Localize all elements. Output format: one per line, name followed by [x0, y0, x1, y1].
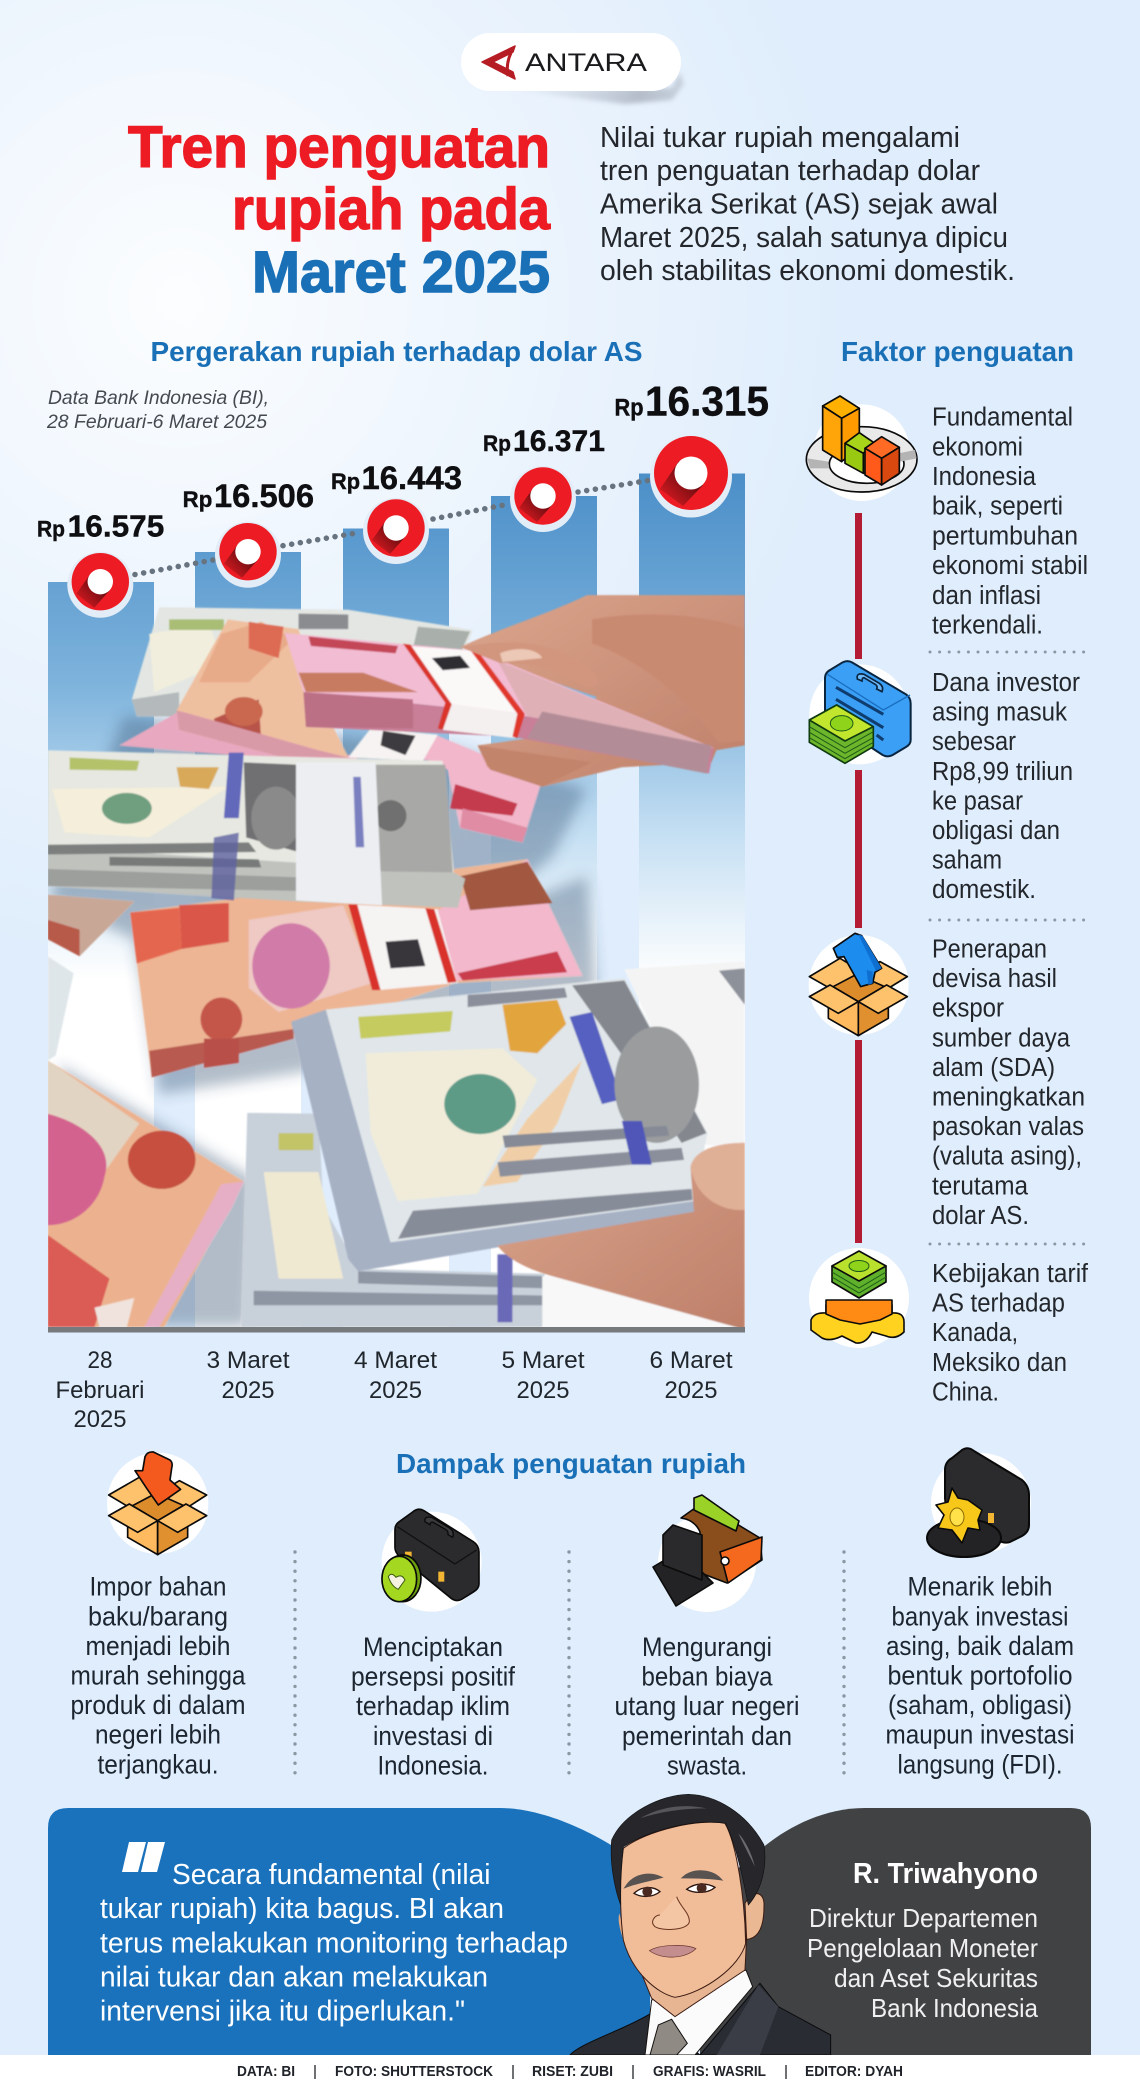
text: impact 4: (saham, obligasi) — [888, 1690, 1072, 1720]
white paper — [542, 1276, 745, 1329]
date labels: 2025 — [516, 1377, 570, 1404]
bars — [48, 474, 745, 1328]
value labels: 16.506 — [214, 478, 314, 514]
text: impact 3: swasta. — [667, 1750, 747, 1780]
date labels: 2025 — [222, 1377, 274, 1404]
text: impact 1: negeri lebih — [95, 1720, 221, 1750]
text: factor 1: dan inflasi — [932, 582, 1041, 610]
data source note: 28 Februari-6 Maret 2025 — [46, 411, 267, 433]
date labels: 2025 — [369, 1377, 422, 1404]
title — [128, 115, 551, 305]
text: impact 3: Mengurangi — [642, 1632, 772, 1662]
face — [621, 1822, 746, 1997]
value labels: 16.315 — [645, 378, 769, 424]
text: impact 4: Menarik lebih — [908, 1572, 1052, 1602]
brows — [626, 1875, 661, 1887]
text: impact 3: utang luar negeri — [614, 1691, 800, 1721]
text: impact 2: terhadap iklim — [356, 1691, 510, 1721]
speaker role: Pengelolaan Moneter — [807, 1933, 1038, 1963]
text: factor 4: AS terhadap — [932, 1290, 1065, 1318]
quote text: nilai tukar dan akan melakukan — [100, 1962, 488, 1994]
marker: 4 Mar — [363, 498, 429, 564]
panel: factors timeline — [806, 396, 1090, 1406]
dotted trend line — [135, 480, 651, 574]
text: impact 4: banyak investasi — [892, 1601, 1068, 1631]
marker: 5 Mar — [510, 466, 576, 532]
title: Maret 2025 — [252, 240, 550, 305]
footer: credits — [0, 2055, 1140, 2090]
footer: credits: EDITOR: DYAH — [805, 2064, 903, 2080]
text: factor 3: sumber daya — [932, 1024, 1071, 1052]
icon: box with up arrow — [809, 933, 909, 1036]
text: factor 1: pertumbuhan — [932, 522, 1078, 550]
icon: debt tower and wallet — [653, 1495, 762, 1612]
text: factor 3: devisa hasil — [932, 965, 1057, 993]
date labels: 5 Maret — [502, 1347, 585, 1374]
footer: credits: RISET: ZUBI — [532, 2064, 613, 2080]
text: impact 1 — [70, 1572, 246, 1779]
icon: black briefcase with gold star — [927, 1448, 1031, 1557]
text: factor 4: Meksiko dan — [932, 1349, 1067, 1377]
ear — [745, 1894, 764, 1939]
large dollar stack — [48, 847, 465, 908]
text: impact 2: investasi di — [373, 1721, 493, 1751]
bar chart — [37, 378, 769, 1332]
speaker role: dan Aset Sekuritas — [834, 1963, 1038, 1993]
icon: quotation mark — [122, 1842, 165, 1872]
speaker role: Direktur Departemen — [809, 1903, 1038, 1933]
value labels: 16.575 — [68, 509, 164, 544]
text: factor 3: meningkatkan — [932, 1084, 1085, 1112]
value labels: Rp — [614, 394, 644, 422]
panel: impact 4 — [886, 1448, 1074, 1779]
neck — [640, 1937, 747, 2017]
date labels: 6 Maret — [650, 1347, 733, 1374]
icon: box with down arrow — [107, 1452, 208, 1555]
date labels: Februari — [56, 1377, 144, 1404]
date labels: 4 Maret — [354, 1347, 437, 1374]
value labels: 16.371 — [513, 425, 605, 458]
text: factor 3: terutama — [932, 1172, 1029, 1200]
dividers — [295, 1552, 844, 1774]
text: factor 2: Dana investor — [932, 669, 1080, 697]
text: factor 1: ekonomi — [932, 433, 1023, 461]
date labels: 28 — [88, 1347, 112, 1374]
text: factor 4: Kebijakan tarif — [932, 1260, 1089, 1288]
text: impact 1: terjangkau. — [98, 1749, 218, 1779]
footer: credits: FOTO: SHUTTERSTOCK — [335, 2064, 493, 2080]
date labels: 2025 — [74, 1406, 126, 1433]
front dollar bundle — [291, 1010, 696, 1271]
text: impact 1: baku/barang — [88, 1601, 228, 1631]
logo: ANTARA: ANTARA — [525, 49, 647, 77]
text: factor 1: Fundamental — [932, 404, 1073, 432]
photo: rupiah and dollar banknotes — [48, 595, 745, 1329]
left strip — [48, 895, 134, 956]
speaker role: Bank Indonesia — [871, 1993, 1038, 2023]
heading: factors: Faktor penguatan — [841, 336, 1074, 367]
text: impact 1: menjadi lebih — [86, 1631, 230, 1661]
value labels — [37, 378, 769, 544]
date labels: 3 Maret — [206, 1347, 290, 1374]
intro text — [600, 122, 1015, 287]
panel: speaker — [700, 1808, 1091, 2055]
lips — [649, 1945, 696, 1957]
tie — [650, 2019, 687, 2055]
icon: money on puzzle piece — [809, 1248, 909, 1348]
back dollar stack — [132, 607, 473, 716]
panel: impact 3 — [614, 1495, 800, 1780]
panel: impact 1 — [70, 1452, 246, 1779]
intro text: tren penguatan terhadap dolar — [600, 155, 980, 187]
text: impact 4: bentuk portofolio — [888, 1660, 1072, 1690]
quote text — [100, 1859, 568, 2028]
back pink note — [423, 735, 541, 828]
title: rupiah pada — [232, 177, 551, 242]
text: factor 3: dolar AS. — [932, 1202, 1029, 1230]
text: factor 2: saham — [932, 847, 1002, 875]
text: impact 4 — [886, 1572, 1074, 1779]
text: impact 2 — [351, 1632, 516, 1780]
text: factor 3: Penerapan — [932, 936, 1047, 964]
text: factor 2 — [932, 669, 1080, 904]
text: factor 2: domestik. — [932, 876, 1036, 904]
text: factor 2: obligasi dan — [932, 817, 1060, 845]
value labels: 16.443 — [362, 460, 462, 496]
intro text: oleh stabilitas ekonomi domestik. — [600, 255, 1015, 287]
speaker name: R. Triwahyono — [853, 1858, 1038, 1890]
data source note — [46, 387, 269, 433]
peach note stack — [177, 619, 348, 758]
quote text: Secara fundamental (nilai — [172, 1859, 490, 1891]
marker: 3 Mar — [215, 522, 281, 588]
value labels: Rp — [331, 469, 360, 494]
text: factor 3: pasokan valas — [932, 1113, 1084, 1141]
footer: credits: DATA: BI — [237, 2064, 295, 2080]
text: impact 4: asing, baik dalam — [886, 1631, 1074, 1661]
rupiah bundle in hand — [285, 633, 714, 774]
text: factor 2: sebesar — [932, 728, 1016, 756]
hair — [611, 1794, 765, 1905]
text: factor 4: Kanada, — [932, 1319, 1018, 1347]
marker: 6 Mar — [650, 436, 732, 518]
icon: briefcase and money — [809, 661, 911, 764]
eyes — [634, 1888, 660, 1896]
text: factor 3: (valuta asing), — [932, 1143, 1082, 1171]
text: impact 3: beban biaya — [642, 1662, 773, 1692]
lower pink note — [130, 859, 582, 1077]
text: impact 2: persepsi positif — [351, 1662, 516, 1692]
text: impact 2: Indonesia. — [378, 1750, 488, 1780]
quote text: tukar rupiah) kita bagus. BI akan — [100, 1893, 504, 1925]
text: factor 1: ekonomi stabil — [932, 552, 1088, 580]
top hand — [463, 595, 745, 787]
lower left pink note — [48, 1060, 244, 1327]
text: factor 3: ekspor — [932, 995, 1004, 1023]
panel: quote — [48, 1808, 650, 2055]
text: impact 1: produk di dalam — [70, 1690, 246, 1720]
icon: black briefcase with green badge — [382, 1509, 482, 1612]
lower hand — [498, 1143, 745, 1329]
text: factor 1: baik, seperti — [932, 493, 1063, 521]
text: factor 4 — [932, 1260, 1089, 1406]
nose — [653, 1897, 689, 1929]
text: factor 1: Indonesia — [932, 463, 1037, 491]
text: factor 4: China. — [932, 1378, 999, 1406]
title: Tren penguatan — [128, 115, 550, 180]
heading: impact: Dampak penguatan rupiah — [396, 1448, 746, 1479]
logo: ANTARA — [461, 33, 684, 104]
text: impact 3: pemerintah dan — [622, 1721, 792, 1751]
text: factor 1 — [932, 404, 1088, 640]
marker: 28 Feb — [67, 552, 133, 618]
data source note: Data Bank Indonesia (BI), — [48, 387, 269, 409]
intro text: Amerika Serikat (AS) sejak awal — [600, 188, 998, 220]
quote text: intervensi jika itu diperlukan." — [100, 1996, 465, 2028]
lower dollar stack — [241, 1113, 545, 1327]
text: impact 1: Impor bahan — [90, 1572, 226, 1602]
soft shadows — [48, 716, 597, 1327]
text: impact 3 — [614, 1632, 800, 1780]
icon: bar chart on ring — [806, 396, 917, 501]
timeline connector — [855, 513, 862, 1243]
suit — [570, 1983, 831, 2055]
date labels — [56, 1347, 733, 1433]
panel: impact 2 — [351, 1509, 516, 1780]
text: impact 1: murah sehingga — [70, 1660, 246, 1690]
quote text: terus melakukan monitoring terhadap — [100, 1928, 568, 1960]
text: factor 2: asing masuk — [932, 699, 1067, 727]
value labels: Rp — [483, 431, 511, 456]
text: factor 3 — [932, 936, 1085, 1230]
text: impact 4: langsung (FDI). — [898, 1749, 1062, 1779]
value labels: Rp — [37, 517, 65, 542]
text: impact 4: maupun investasi — [886, 1720, 1074, 1750]
heading: chart: Pergerakan rupiah terhadap dolar AS — [150, 336, 642, 367]
footer: credits: GRAFIS: WASRIL — [653, 2064, 766, 2080]
date labels: 2025 — [664, 1377, 718, 1404]
text: factor 1: terkendali. — [932, 612, 1043, 640]
text: factor 2: Rp8,99 triliun — [932, 758, 1073, 786]
thumb — [461, 644, 508, 664]
chart baseline — [48, 1327, 745, 1332]
text: factor 2: ke pasar — [932, 787, 1023, 815]
speaker role — [807, 1903, 1038, 2023]
value labels: Rp — [183, 487, 212, 512]
intro text: Nilai tukar rupiah mengalami — [600, 122, 960, 154]
portrait: R. Triwahyono — [570, 1794, 831, 2055]
text: factor 3: alam (SDA) — [932, 1054, 1055, 1082]
text: impact 2: Menciptakan — [363, 1632, 503, 1662]
left flat pink note — [119, 711, 358, 765]
shirt — [645, 1970, 753, 2055]
intro text: Maret 2025, salah satunya dipicu — [600, 222, 1008, 254]
